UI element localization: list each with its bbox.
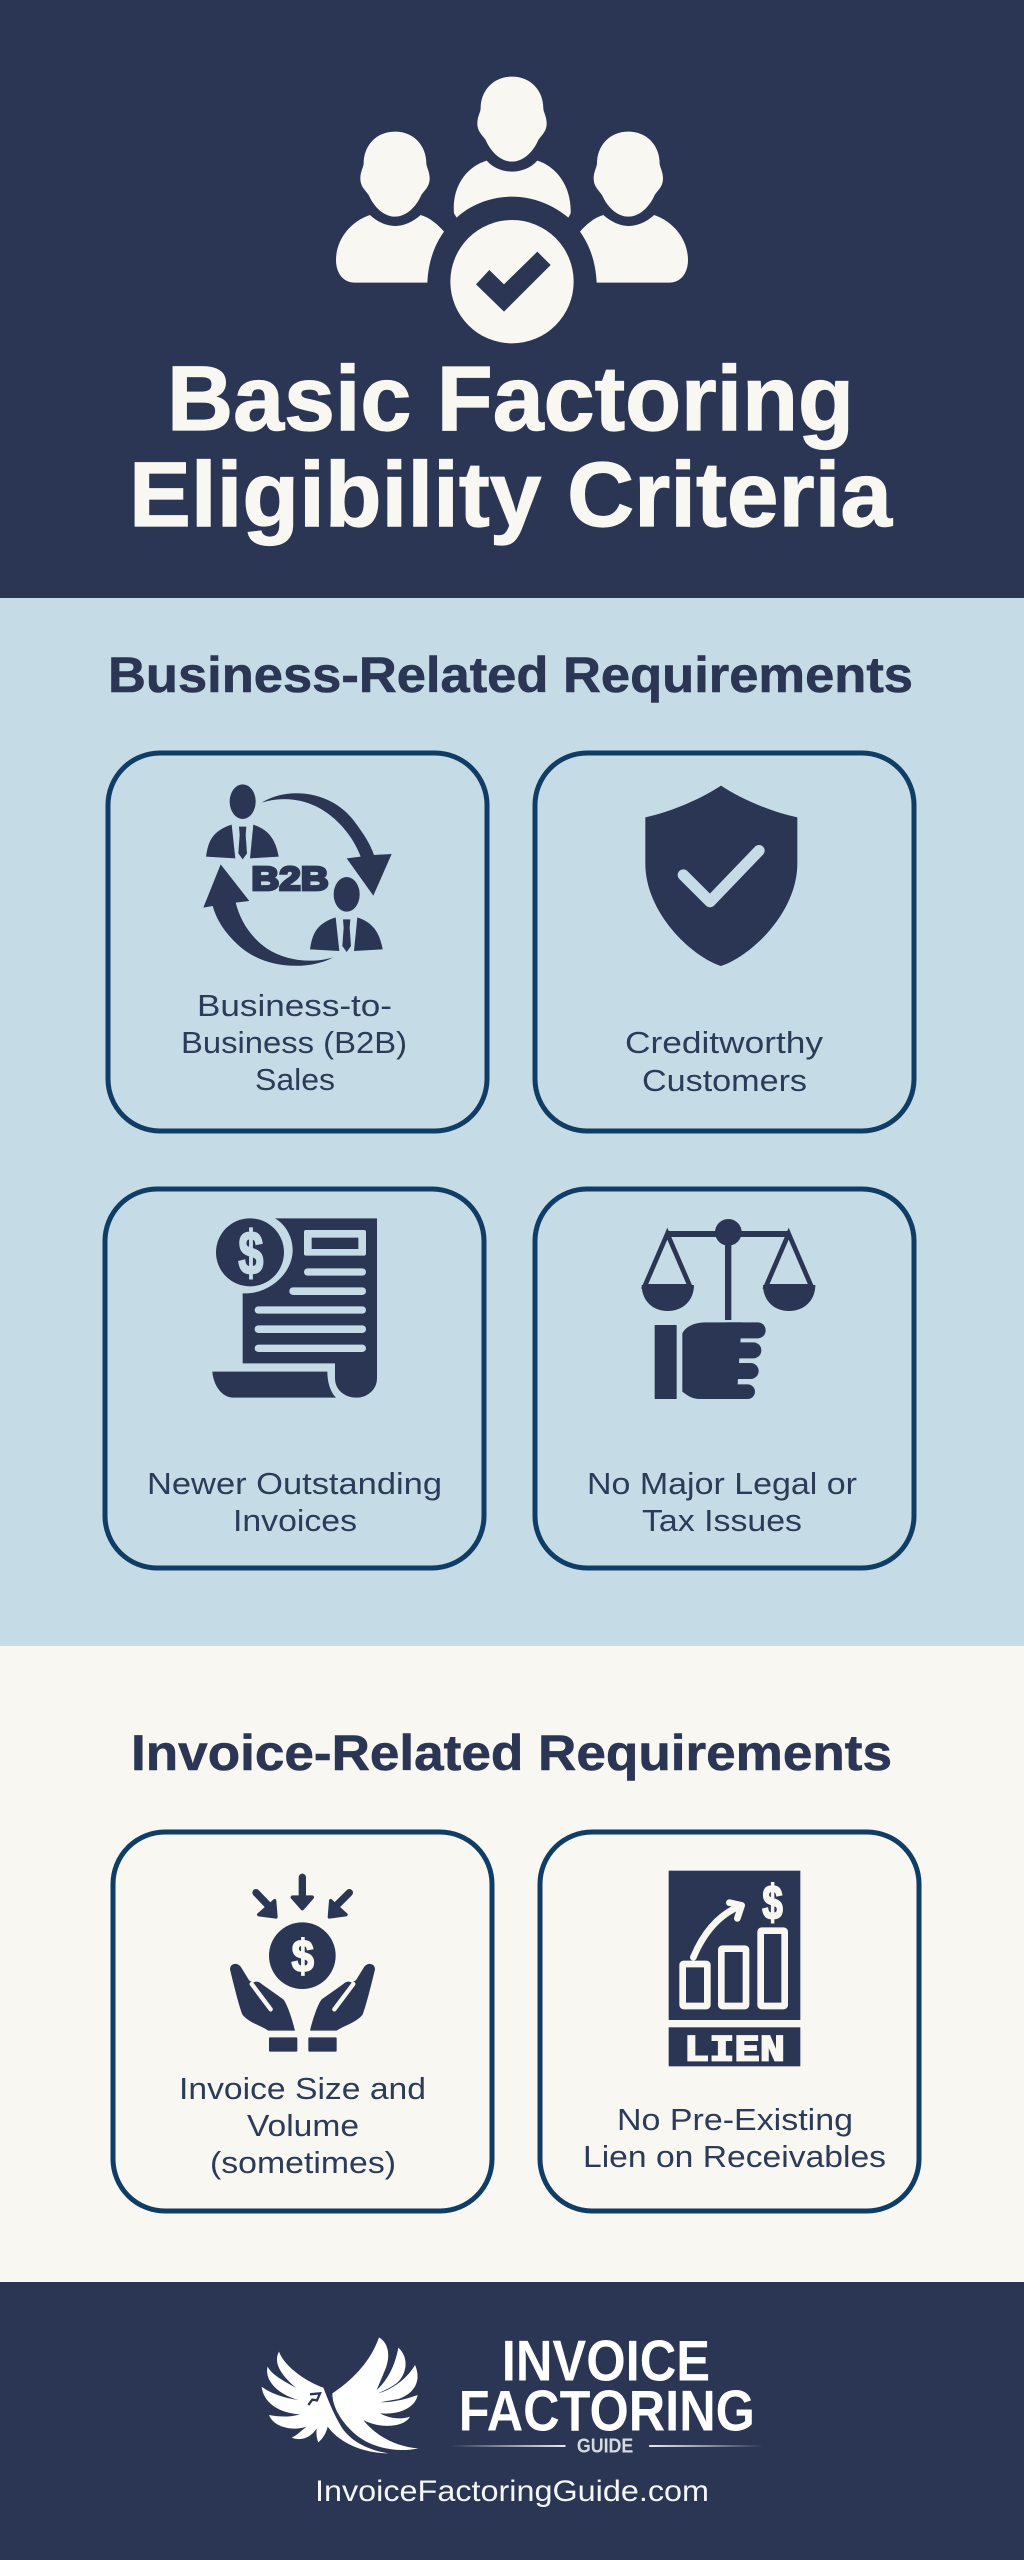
label <box>147 1466 442 1538</box>
label: Invoice Size and <box>179 2071 426 2106</box>
label: Business (B2B) <box>181 1025 407 1060</box>
icon: lien chart <box>669 1871 800 2073</box>
icon: eagle <box>262 2337 418 2453</box>
label: Sales <box>255 1062 335 1097</box>
icon: hand holding scales <box>642 1219 815 1399</box>
icon: hands receiving money <box>230 1877 375 2052</box>
card: no major legal or tax issues <box>535 1189 914 1568</box>
icon: B2B exchange <box>203 784 392 966</box>
label: Volume <box>247 2108 359 2143</box>
label: No Major Legal or <box>587 1466 857 1501</box>
panel: business-related requirements <box>0 598 1024 1646</box>
logo: invoice factoring guide wordmark: GUIDE <box>577 2436 633 2458</box>
icon: hands receiving money: $ <box>292 1930 314 1981</box>
card: business-to-business sales <box>108 753 487 1131</box>
title: Eligibility Criteria <box>129 444 893 546</box>
title: Basic Factoring <box>167 348 854 450</box>
title <box>129 348 893 546</box>
card: no pre-existing lien <box>540 1832 919 2211</box>
heading: business-related requirements: Business-Related Requirements <box>108 647 913 703</box>
label: Customers <box>642 1063 807 1098</box>
label: Lien on Receivables <box>583 2139 886 2174</box>
label <box>179 2071 426 2180</box>
label <box>625 1025 824 1098</box>
icon: invoice document with dollar <box>212 1218 377 1398</box>
panel: invoice-related requirements <box>0 1646 1024 2282</box>
icon: lien chart: $ <box>762 1876 783 1930</box>
logo: invoice factoring guide wordmark: FACTORING <box>459 2380 755 2443</box>
label: Tax Issues <box>642 1503 802 1538</box>
label: Invoices <box>233 1503 357 1538</box>
card: invoice size and volume <box>113 1832 492 2211</box>
label: (sometimes) <box>210 2145 396 2180</box>
label <box>181 988 407 1097</box>
label <box>583 2102 886 2174</box>
icon: invoice document with dollar: $ <box>238 1219 263 1288</box>
label: Creditworthy <box>625 1025 824 1060</box>
panel: header <box>0 0 1024 598</box>
label: No Pre-Existing <box>617 2102 853 2137</box>
panel: footer <box>0 2282 1024 2560</box>
icon: B2B exchange: B2B <box>251 861 329 898</box>
icon: group of people with check mark <box>336 77 688 343</box>
logo: invoice factoring guide wordmark: INVOICE <box>502 2330 710 2393</box>
icon: lien chart: LIEN <box>684 2031 785 2073</box>
heading: invoice-related requirements: Invoice-Related Requirements <box>131 1725 892 1781</box>
card: creditworthy customers <box>535 753 914 1131</box>
card: newer outstanding invoices <box>105 1189 484 1568</box>
icon: shield with check <box>645 786 797 966</box>
logo: invoice factoring guide wordmark <box>450 2330 763 2458</box>
label <box>587 1466 857 1538</box>
label: Newer Outstanding <box>147 1466 442 1501</box>
website url: InvoiceFactoringGuide.com <box>315 2475 709 2508</box>
label: Business-to- <box>197 988 392 1023</box>
